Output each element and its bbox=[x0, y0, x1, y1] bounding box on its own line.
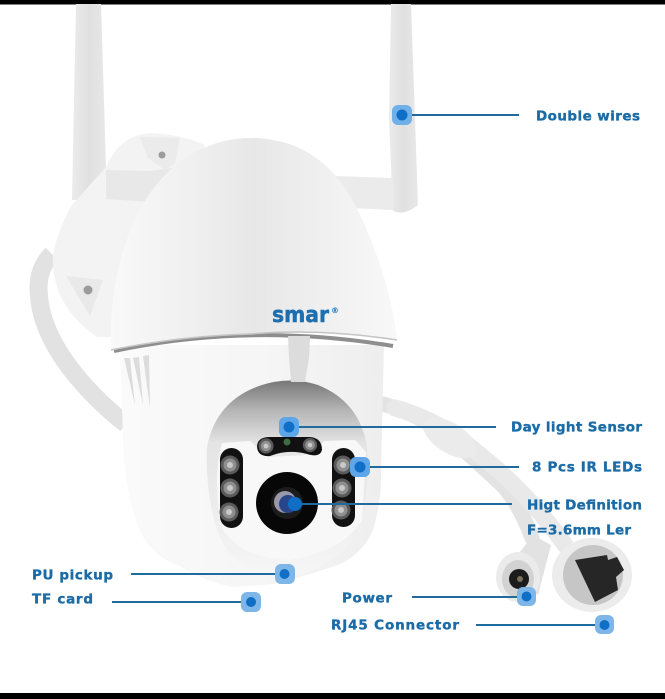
camera lower body bbox=[120, 345, 384, 587]
callout: double wires bbox=[392, 105, 640, 125]
callout: IR LEDs: 8 Pcs IR LEDs bbox=[532, 460, 642, 476]
callout: RJ45 connector: RJ45 Connector bbox=[331, 618, 459, 634]
RJ45 connector bbox=[552, 538, 632, 612]
camera face recess bbox=[207, 380, 368, 575]
dome rim shadow bbox=[114, 335, 393, 351]
left IR LED bar bbox=[220, 448, 243, 528]
callout: power: Power bbox=[342, 590, 392, 606]
dome seam bbox=[111, 332, 397, 350]
power connector bbox=[496, 535, 551, 602]
right antenna bbox=[389, 4, 418, 213]
left antenna bbox=[72, 4, 107, 200]
callout: double wires: Double wires bbox=[536, 108, 640, 124]
callout: high definition: Higt Definition bbox=[527, 498, 642, 514]
vent slots bbox=[124, 355, 150, 408]
callout: high definition: F=3.6mm Ler bbox=[527, 522, 631, 538]
lens bbox=[256, 472, 318, 534]
callout: IR LEDs bbox=[350, 457, 642, 477]
brand logo: ® bbox=[331, 306, 339, 315]
right antenna arm bbox=[335, 176, 393, 210]
callout: RJ45 connector bbox=[331, 615, 614, 634]
wall mount bbox=[53, 133, 205, 337]
left cable bbox=[39, 254, 126, 424]
callout: high definition bbox=[288, 497, 642, 538]
rear cables to connectors bbox=[383, 404, 565, 545]
brand logo: smar bbox=[272, 303, 329, 328]
centre ridge bbox=[288, 336, 310, 382]
callout: day light sensor: Day light Sensor bbox=[511, 420, 642, 436]
right IR LED bar bbox=[332, 448, 355, 527]
top black bar bbox=[0, 0, 665, 4]
top IR LED bar bbox=[257, 437, 322, 456]
callout: PU pickup: PU pickup bbox=[32, 568, 113, 584]
callout: day light sensor bbox=[279, 417, 642, 437]
camera face plate bbox=[217, 440, 366, 560]
callout: PU pickup bbox=[32, 564, 295, 584]
bottom black bar bbox=[0, 693, 665, 699]
dome top bbox=[111, 138, 397, 350]
callout: TF card bbox=[32, 592, 261, 612]
callout: TF card: TF card bbox=[32, 592, 93, 608]
callout: power bbox=[342, 587, 536, 606]
